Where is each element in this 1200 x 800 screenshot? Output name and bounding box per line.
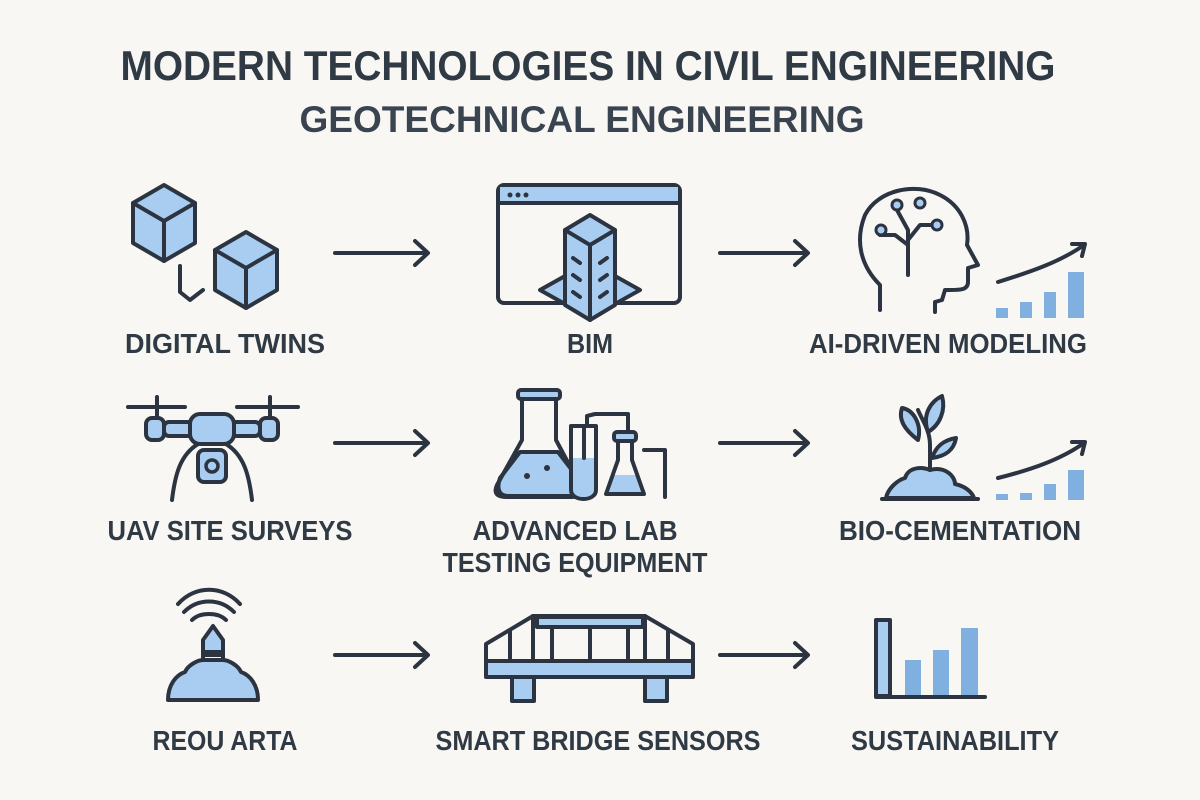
- icon: antenna: [168, 590, 258, 700]
- label: digital twins: DIGITAL TWINS: [125, 328, 325, 359]
- label: AI-driven modeling: AI-DRIVEN MODELING: [809, 328, 1087, 359]
- icon: lab equipment: [496, 390, 665, 499]
- label: BIM: BIM: [567, 328, 613, 359]
- icon: sustainability bar chart: [876, 620, 985, 697]
- label: advanced lab testing equipment: [442, 515, 708, 578]
- label: REOU ARTA: REOU ARTA: [152, 725, 298, 756]
- arrow 4: [720, 431, 808, 455]
- title: MODERN TECHNOLOGIES IN CIVIL ENGINEERING: [120, 42, 1056, 89]
- icon: AI-driven modeling: [860, 189, 1085, 318]
- icon: drone: [128, 397, 298, 500]
- subtitle: GEOTECHNICAL ENGINEERING: [300, 99, 864, 140]
- arrow 1: [335, 241, 428, 265]
- label: sustainability: SUSTAINABILITY: [851, 725, 1059, 756]
- arrow 5: [335, 643, 428, 667]
- label: UAV site surveys: UAV SITE SURVEYS: [108, 515, 352, 546]
- icon: bridge: [486, 616, 693, 701]
- arrow 2: [720, 241, 808, 265]
- label: bio-cementation: BIO-CEMENTATION: [839, 515, 1081, 546]
- icon: digital twins: [133, 185, 277, 308]
- arrow 6: [720, 643, 808, 667]
- icon: BIM: [498, 185, 680, 320]
- label: smart bridge sensors: SMART BRIDGE SENSORS: [436, 725, 760, 756]
- label: advanced lab testing equipment: TESTING EQUIPMENT: [442, 547, 708, 578]
- icon: bio-cementation: [882, 396, 1085, 500]
- label: advanced lab testing equipment: ADVANCED LAB: [472, 515, 678, 546]
- arrow 3: [335, 431, 428, 455]
